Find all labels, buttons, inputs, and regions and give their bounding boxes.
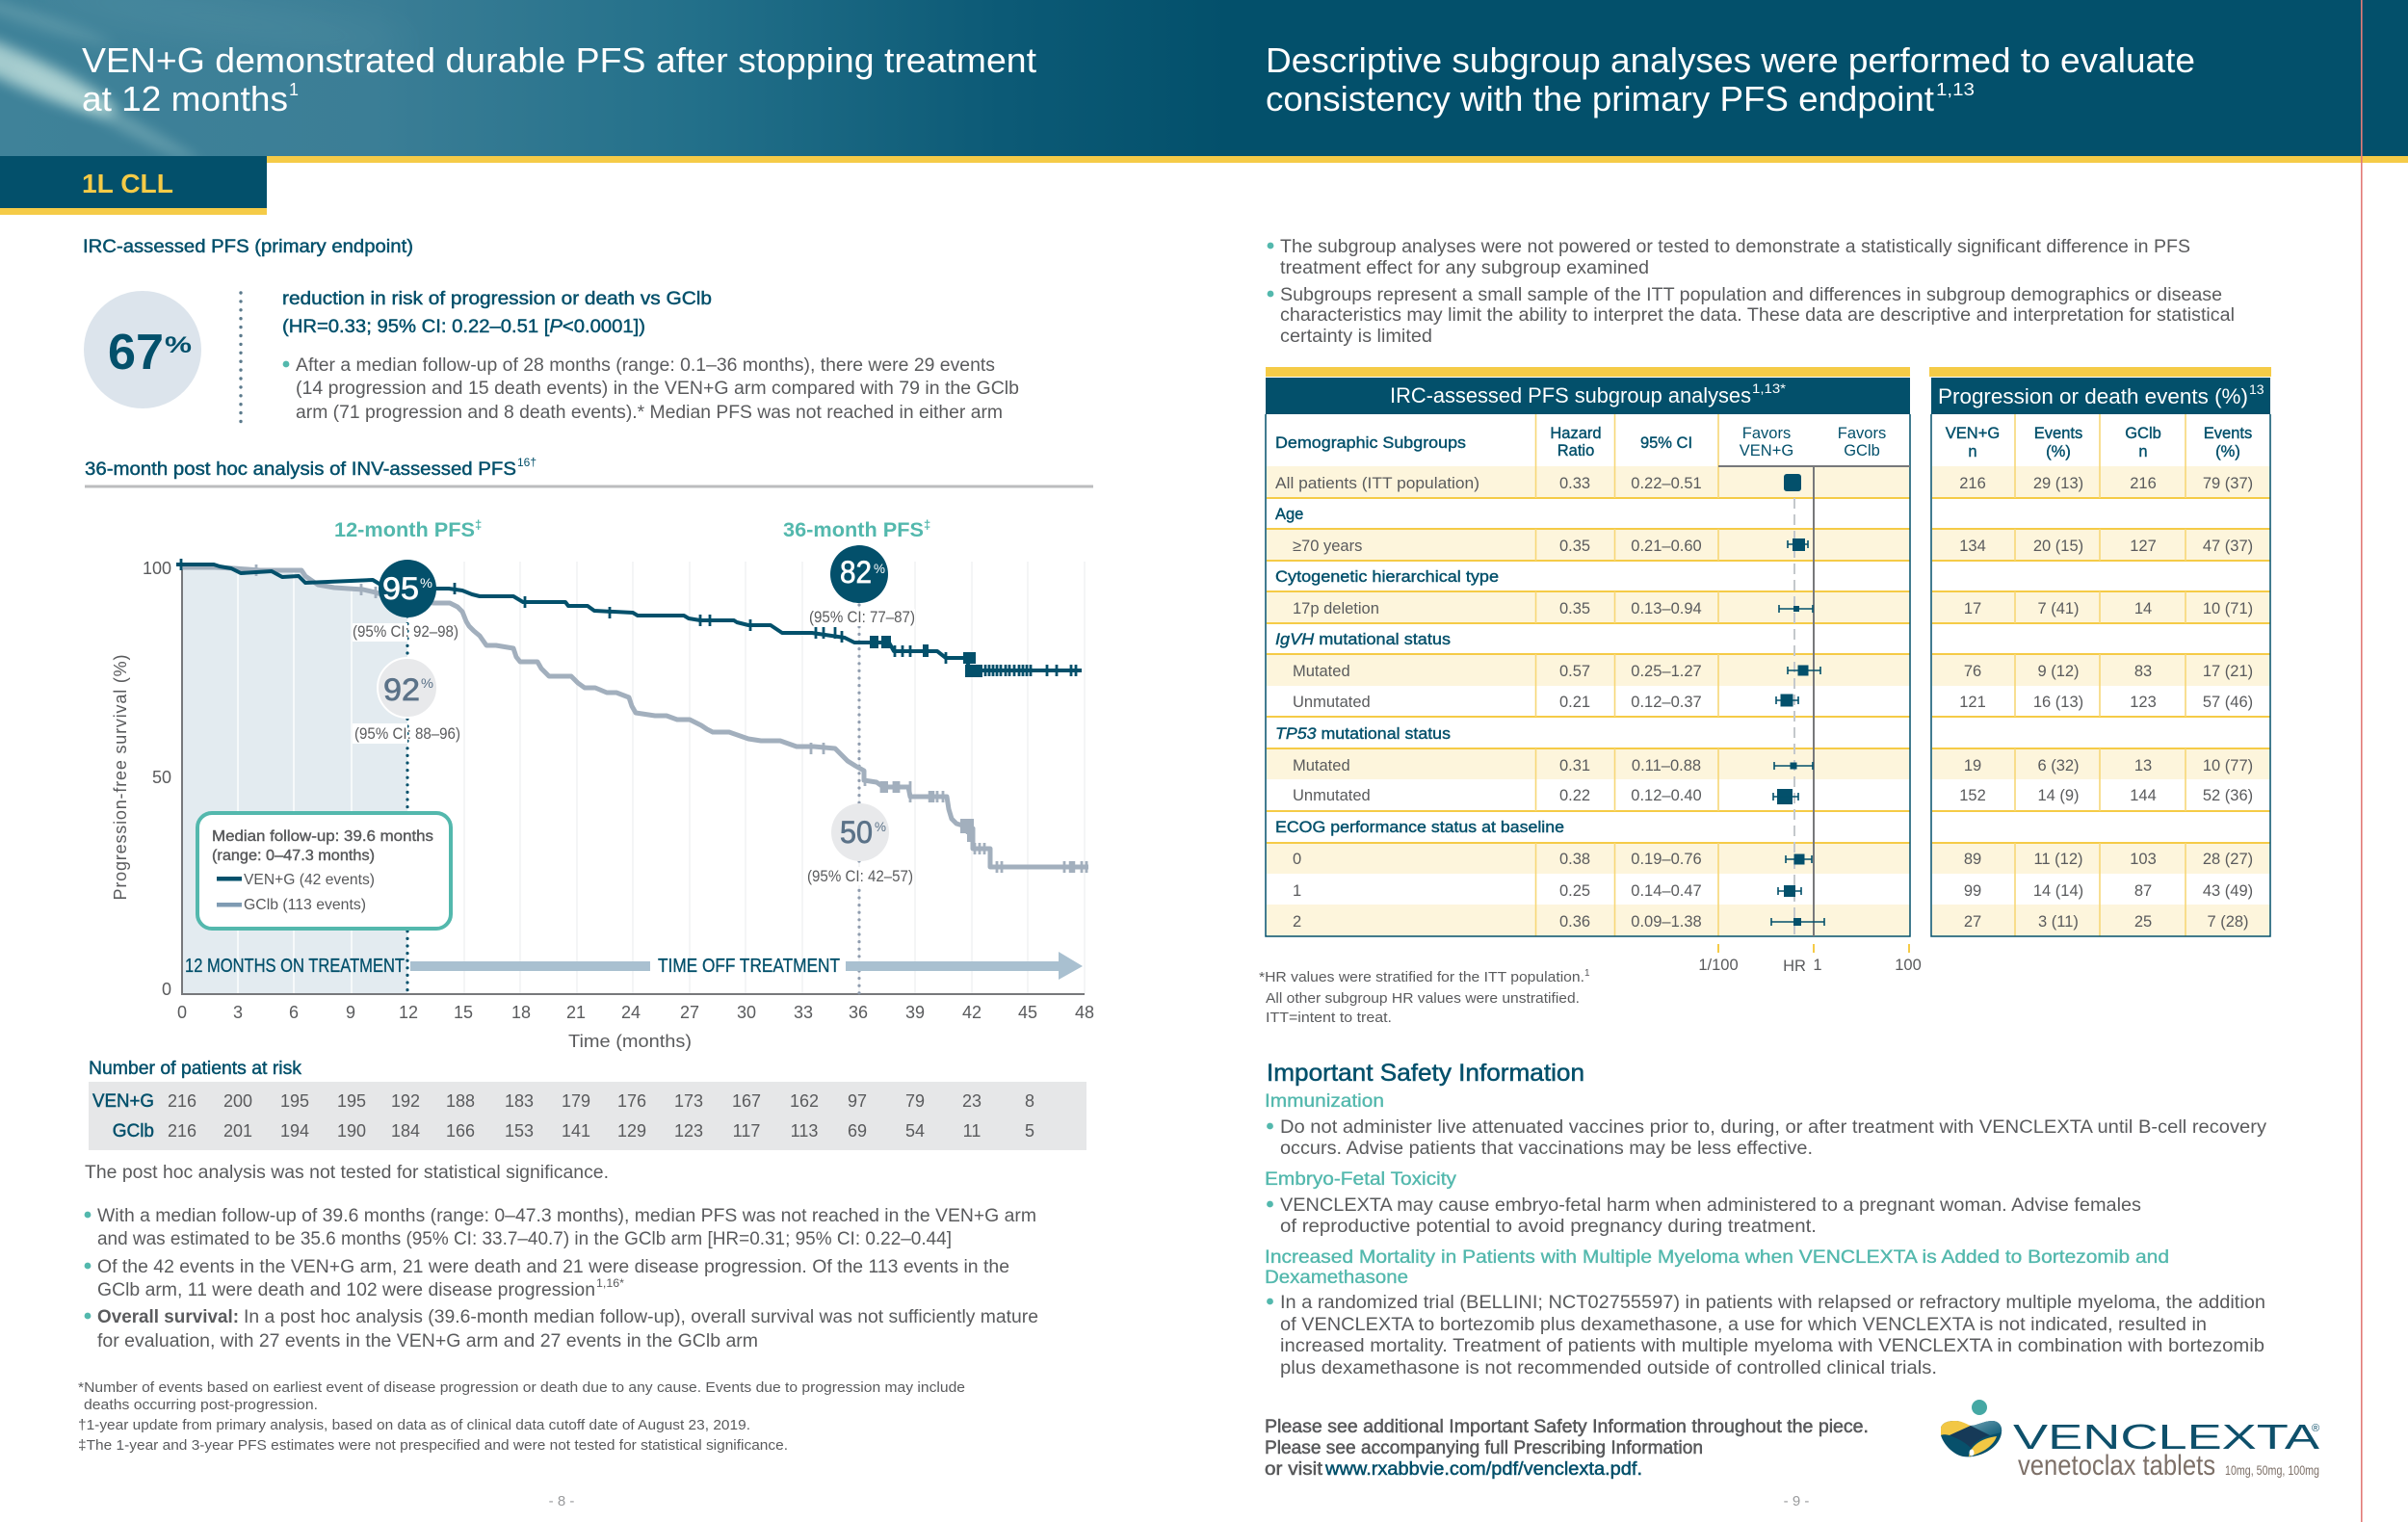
page number 9: - 9 - [1784, 1493, 1809, 1509]
heading: 36-month post hoc analysis: 16† [517, 458, 537, 469]
table: number of patients at risk: VEN+G [92, 1091, 154, 1112]
95% CI values [1631, 475, 1702, 931]
VEN+G curve [176, 559, 1082, 676]
text block: subgroup caveats: certainty is limited [1280, 327, 1432, 347]
right page title: consistency with the primary PFS endpoint [1266, 79, 1934, 118]
hazard ratio values: 0.36 [1559, 913, 1590, 931]
panel: Important Safety Information: VENCLEXTA may cause embryo-fetal harm when administered to a pregnant woman. Advise females [1280, 1195, 2141, 1216]
panel: 12-month PFS labels: 12-month PFS [334, 518, 475, 541]
panel: Important Safety Information: Immunization [1265, 1091, 1384, 1112]
left page title: at 12 months [82, 79, 288, 118]
row labels: ECOG performance status at baseline [1275, 819, 1564, 836]
panel: 36-month PFS labels [783, 517, 930, 885]
row labels: ≥70 years [1293, 538, 1362, 555]
footnotes: left page: ‡The 1-year and 3-year PFS estimates were not prespecified and were not tested for statistical significance. [78, 1437, 788, 1454]
row labels: Unmutated [1293, 787, 1371, 804]
x axis labels: Time (months) [568, 1032, 692, 1051]
treatment timeline arrow [185, 952, 1083, 980]
column headers [1946, 425, 2252, 460]
VEN+G events values [2033, 475, 2083, 931]
VEN+G risk row: 179 [562, 1091, 590, 1111]
text block: post hoc bullets: Of the 42 events in the VEN+G arm, 21 were death and 21 were disease progression. Of the 113 events in the [97, 1257, 1009, 1277]
hazard ratio values: 0.33 [1559, 475, 1590, 492]
95% CI values: 0.25–1.27 [1631, 663, 1702, 680]
panel: 12-month PFS labels: ‡ [475, 517, 482, 532]
text block: post hoc bullets: In a post hoc analysis (39.6-month median follow-up), overall survival was not sufficiently mature [244, 1307, 1038, 1327]
footnotes: forest plot: All other subgroup HR values were unstratified. [1266, 990, 1580, 1007]
row labels: 17p deletion [1293, 600, 1379, 617]
GClb n values: 14 [2134, 600, 2152, 617]
column headers: Events [2204, 425, 2252, 442]
95% CI values: 0.14–0.47 [1631, 882, 1702, 900]
column headers: Ratio [1557, 442, 1594, 459]
VEN+G n values: 76 [1964, 663, 1981, 680]
GClb events values: 43 (49) [2203, 882, 2253, 900]
VEN+G n values [1959, 475, 1986, 931]
VEN+G risk row: 188 [446, 1091, 475, 1111]
VEN+G risk row: 167 [732, 1091, 761, 1111]
95% CI values: 0.19–0.76 [1631, 851, 1702, 868]
VEN+G n values: 27 [1964, 913, 1981, 931]
column headers: n [2138, 443, 2148, 460]
row labels: Mutated [1293, 663, 1350, 680]
GClb n values: 123 [2130, 694, 2157, 711]
x axis labels: 30 [737, 1003, 756, 1022]
table: number of patients at risk: GClb [113, 1121, 154, 1142]
VEN+G risk row: 173 [674, 1091, 703, 1111]
text block: see prescribing information: www.rxabbvie.com/pdf/venclexta.pdf. [1324, 1459, 1642, 1480]
treatment timeline arrow: 12 MONTHS ON TREATMENT [185, 956, 405, 977]
panel: Important Safety Information: occurs. Advise patients that vaccinations may be less effective. [1280, 1139, 1813, 1159]
forest plot axis: 1/100 [1698, 957, 1739, 974]
text block: subgroup caveats: characteristics may limit the ability to interpret the data. These data are descriptive and interpretation for statistical [1280, 305, 2235, 326]
text block: post hoc bullets: Overall survival: [97, 1307, 239, 1327]
GClb risk row: 129 [617, 1121, 646, 1141]
text block: HR summary: (14 progression and 15 death events) in the VEN+G arm compared with 79 in the GClb [296, 379, 1019, 399]
panel: 12-month PFS labels: (95% CI: 92–98) [353, 623, 458, 641]
footnotes: left page: *Number of events based on earliest event of disease progression or death due to any cause. Events due to progression may include [78, 1379, 965, 1396]
footnotes: left page: †1-year update from primary analysis, based on data as of clinical data cutoff date of August 23, 2019. [78, 1417, 750, 1433]
text block: subgroup caveats: treatment effect for any subgroup examined [1280, 258, 1649, 278]
heading: primary endpoint: IRC-assessed PFS (primary endpoint) [83, 237, 413, 257]
VEN+G risk row: 200 [223, 1091, 252, 1111]
panel: 36-month PFS labels: 82 [840, 555, 872, 590]
hazard ratio values: 0.57 [1559, 663, 1590, 680]
text block: subgroup caveats: Subgroups represent a small sample of the ITT population and differences in subgroup demographics or disease [1280, 285, 2222, 305]
GClb events values: 10 (77) [2203, 757, 2253, 774]
text block: see prescribing information: Please see additional Important Safety Information throughout the piece. [1265, 1417, 1869, 1437]
text block: HR summary: After a median follow-up of 28 months (range: 0.1–36 months), there were 29 events [296, 355, 995, 376]
row labels: IgVH mutational status [1275, 631, 1451, 648]
GClb n values: 127 [2130, 538, 2157, 555]
x axis labels: 12 [399, 1003, 418, 1022]
panel: Important Safety Information: plus dexamethasone is not recommended outside of controlled clinical trials. [1280, 1358, 1937, 1378]
GClb events values: 28 (27) [2203, 851, 2253, 868]
hazard ratio values [1559, 475, 1590, 931]
logo: VENCLEXTA: venetoclax tablets [2018, 1450, 2215, 1482]
95% CI values: 0.12–0.37 [1631, 694, 1702, 711]
GClb risk row: 54 [905, 1121, 925, 1141]
footnotes: forest plot [1259, 968, 1590, 1026]
panel: Important Safety Information: of VENCLEXTA to bortezomib plus dexamethasone, a use for which VENCLEXTA is not indicated, resulted in [1280, 1315, 2207, 1335]
hazard ratio values: 0.38 [1559, 851, 1590, 868]
text block: HR summary: arm (71 progression and 8 death events).* Median PFS was not reached in either arm [296, 403, 1003, 423]
table: IRC-assessed PFS subgroup analyses: 1,13* [1752, 380, 1787, 396]
footnotes: left page [78, 1379, 965, 1454]
GClb risk row: 113 [791, 1121, 818, 1141]
VEN+G events values: 14 (9) [2037, 787, 2080, 804]
censoring blocks on GClb curve [880, 781, 975, 842]
GClb n values: 83 [2134, 663, 2152, 680]
x axis labels: 45 [1018, 1003, 1037, 1022]
x axis labels: 33 [794, 1003, 813, 1022]
GClb risk row: 5 [1025, 1121, 1034, 1141]
text block: post hoc bullets: and was estimated to be 35.6 months (95% CI: 33.7–40.7) in the GClb arm [HR=0.31; 95% CI: 0.22–0.44] [97, 1229, 952, 1249]
forest plot axis [1698, 944, 1922, 975]
text block: HR summary: (HR=0.33; 95% CI: 0.22–0.51 [ P<0.0001]) [282, 317, 645, 337]
column headers: GClb [2125, 425, 2161, 442]
x axis labels: 18 [511, 1003, 531, 1022]
shaded on-treatment region [182, 568, 407, 994]
panel: Important Safety Information: of reproductive potential to avoid pregnancy during treatment. [1280, 1217, 1817, 1237]
y axis labels: 0 [162, 980, 171, 999]
VEN+G n values: 216 [1959, 475, 1986, 492]
footnotes: forest plot: *HR values were stratified for the ITT population. [1259, 969, 1584, 985]
text block: subgroup caveats [1268, 237, 2235, 347]
95% CI values: 0.13–0.94 [1631, 600, 1702, 617]
panel: 12-month PFS labels: (95% CI: 88–96) [354, 725, 460, 743]
treatment timeline arrow: TIME OFF TREATMENT [658, 956, 840, 977]
GClb risk row [168, 1121, 1034, 1141]
legend: VEN+G (42 events) [244, 872, 375, 888]
column headers: VEN+G [1946, 425, 2000, 442]
footnotes: left page: deaths occurring post-progression. [84, 1397, 318, 1413]
x axis labels: 48 [1075, 1003, 1094, 1022]
panel: 36-month PFS labels: (95% CI: 77–87) [809, 609, 915, 626]
row labels: Cytogenetic hierarchical type [1275, 568, 1499, 586]
text block: see prescribing information [1265, 1417, 1869, 1480]
icon: logo mark [1941, 1400, 2002, 1456]
column headers: 95% CI [1640, 434, 1692, 452]
text block: post hoc bullets: GClb arm, 11 were death and 102 were disease progression [97, 1280, 595, 1300]
heading: 36-month post hoc analysis [85, 458, 1093, 487]
GClb risk row: 216 [168, 1121, 196, 1141]
right page title: 1,13 [1936, 80, 1975, 99]
legend: Median follow-up: 39.6 months [212, 828, 433, 845]
table: number of patients at risk: Number of patients at risk [89, 1059, 302, 1079]
right page title [1266, 40, 2195, 118]
column headers: Favors [1838, 425, 1886, 442]
table: progression or death events: Progression or death events (%) [1938, 384, 2248, 408]
VEN+G risk row: 8 [1025, 1091, 1034, 1111]
hazard ratio values: 0.22 [1559, 787, 1590, 804]
heading: 36-month post hoc analysis: 36-month post hoc analysis of INV-assessed PFS [85, 459, 516, 480]
VEN+G n values: 152 [1959, 787, 1986, 804]
forest plot axis: 100 [1895, 957, 1922, 974]
95% CI values: 0.12–0.40 [1631, 787, 1702, 804]
VEN+G risk row: 192 [391, 1091, 420, 1111]
text block: post hoc bullets: for evaluation, with 27 events in the VEN+G arm and 27 events in the GClb arm [97, 1331, 758, 1351]
VEN+G risk row: 97 [848, 1091, 867, 1111]
x axis labels: 9 [346, 1003, 355, 1022]
VEN+G risk row: 195 [280, 1091, 309, 1111]
VEN+G n values: 19 [1964, 757, 1981, 774]
GClb risk row: 153 [505, 1121, 534, 1141]
x axis labels: 39 [905, 1003, 925, 1022]
hazard ratio values: 0.21 [1559, 694, 1590, 711]
GClb n values: 13 [2134, 757, 2152, 774]
table: progression or death events: 13 [2249, 381, 2264, 397]
table: progression or death events [1929, 367, 2271, 936]
panel: Important Safety Information: Embryo-Fetal Toxicity [1265, 1169, 1457, 1190]
GClb risk row: 201 [223, 1121, 252, 1141]
column headers: Demographic Subgroups [1275, 434, 1466, 452]
GClb n values: 144 [2130, 787, 2157, 804]
x axis labels: 27 [680, 1003, 699, 1022]
GClb risk row: 141 [562, 1121, 590, 1141]
panel: Important Safety Information: Increased Mortality in Patients with Multiple Myeloma when VENCLEXTA is Added to Bortezomib and [1265, 1247, 2169, 1268]
right page title: Descriptive subgroup analyses were performed to evaluate [1266, 40, 2195, 80]
VEN+G risk row: 195 [337, 1091, 366, 1111]
row labels: Age [1275, 506, 1303, 523]
95% CI values: 0.09–1.38 [1631, 913, 1702, 931]
VEN+G n values: 134 [1959, 538, 1986, 555]
section tab: 1L CLL: 1L CLL [82, 169, 173, 198]
panel: 12-month PFS labels: % [421, 675, 433, 691]
GClb risk row: 194 [280, 1121, 309, 1141]
row labels: Mutated [1293, 757, 1350, 774]
GClb risk row: 69 [848, 1121, 867, 1141]
VEN+G events values: 11 (12) [2033, 851, 2083, 868]
panel: Important Safety Information: increased mortality. Treatment of patients with multiple myeloma with VENCLEXTA in combination with bortezomib [1280, 1336, 2264, 1356]
VEN+G events values: 7 (41) [2037, 600, 2080, 617]
GClb n values: 216 [2130, 475, 2157, 492]
hazard ratio values: 0.35 [1559, 600, 1590, 617]
table: number of patients at risk [89, 1059, 1086, 1150]
y axis labels [111, 559, 171, 999]
footnotes: forest plot: 1 [1584, 968, 1590, 979]
text block: HR summary [282, 289, 1019, 423]
panel: Important Safety Information [1265, 1060, 2267, 1378]
GClb risk row: 11 [963, 1121, 981, 1141]
VEN+G events values: 14 (14) [2033, 882, 2083, 900]
VEN+G risk row: 79 [905, 1091, 925, 1111]
VEN+G risk row: 183 [505, 1091, 534, 1111]
GClb events values: 17 (21) [2203, 663, 2253, 680]
column headers: Favors [1742, 425, 1791, 442]
text block: subgroup caveats: The subgroup analyses were not powered or tested to demonstrate a statistically significant difference in PFS [1280, 237, 2190, 257]
x axis labels: 0 [177, 1003, 187, 1022]
page trim line [2361, 0, 2363, 1522]
x axis labels [177, 1003, 1094, 1051]
left page title: 1 [289, 80, 299, 99]
legend [197, 813, 451, 929]
row labels: Unmutated [1293, 694, 1371, 711]
VEN+G events values: 6 (32) [2037, 757, 2080, 774]
hazard ratio values: 0.25 [1559, 882, 1590, 900]
VEN+G risk row: 216 [168, 1091, 196, 1111]
x axis labels: 3 [233, 1003, 243, 1022]
column headers: Events [2034, 425, 2082, 442]
panel: 36-month PFS labels: ‡ [924, 517, 930, 532]
text block: see prescribing information: Please see accompanying full Prescribing Information [1265, 1438, 1703, 1458]
x axis labels: 21 [566, 1003, 586, 1022]
logo: VENCLEXTA: 10mg, 50mg, 100mg [2225, 1462, 2319, 1478]
GClb risk row: 190 [337, 1121, 366, 1141]
dotted divider [239, 293, 243, 422]
GClb events values: 47 (37) [2203, 538, 2253, 555]
callout: 67 percent reduction: % [165, 332, 192, 358]
row labels [1275, 475, 1564, 931]
GClb risk row: 166 [446, 1121, 475, 1141]
panel: 36-month PFS labels: 50 [840, 815, 873, 850]
GClb events values: 10 (71) [2203, 600, 2253, 617]
row labels: 1 [1293, 882, 1301, 900]
column headers: (%) [2215, 443, 2240, 460]
95% CI values: 0.22–0.51 [1631, 475, 1702, 492]
column headers: (%) [2046, 443, 2071, 460]
VEN+G risk row: 162 [790, 1091, 819, 1111]
header banner [0, 0, 2408, 169]
GClb risk row: 117 [733, 1121, 760, 1141]
95% CI values: 0.21–0.60 [1631, 538, 1702, 555]
logo: VENCLEXTA: ® [2312, 1423, 2319, 1434]
GClb events values: 79 (37) [2203, 475, 2253, 492]
y axis labels: 50 [152, 768, 171, 787]
VEN+G n values: 121 [1959, 694, 1986, 711]
row labels: 0 [1293, 851, 1301, 868]
column headers: n [1968, 443, 1977, 460]
GClb curve [181, 564, 1088, 873]
GClb events values [2203, 475, 2253, 931]
x axis labels: 42 [962, 1003, 982, 1022]
text block: HR summary: reduction in risk of progression or death vs GClb [282, 289, 712, 309]
GClb n values [2130, 475, 2157, 931]
chart: Kaplan-Meier PFS curves [111, 517, 1094, 1051]
VEN+G events values: 16 (13) [2033, 694, 2083, 711]
GClb events values: 7 (28) [2207, 913, 2249, 931]
panel: Important Safety Information: Dexamethasone [1265, 1268, 1408, 1288]
VEN+G risk row: 176 [617, 1091, 646, 1111]
text block: post hoc bullets: 1,16* [596, 1276, 624, 1290]
forest plot axis: 1 [1813, 957, 1822, 974]
VEN+G n values: 17 [1964, 600, 1981, 617]
x axis labels: 36 [849, 1003, 868, 1022]
x axis labels: 6 [289, 1003, 299, 1022]
VEN+G risk row: 23 [962, 1091, 982, 1111]
GClb events values: 57 (46) [2203, 694, 2253, 711]
callout: 67 percent reduction: 67 [108, 325, 164, 380]
forest plot [1718, 466, 1910, 936]
VEN+G n values: 99 [1964, 882, 1981, 900]
GClb risk row: 123 [674, 1121, 703, 1141]
censoring blocks on VEN+G curve [870, 636, 982, 677]
shaded rows [1932, 466, 2270, 936]
table: IRC-assessed PFS subgroup analyses [1266, 367, 1922, 975]
hazard ratio values: 0.35 [1559, 538, 1590, 555]
left page title [82, 40, 1036, 118]
y axis labels: 100 [143, 559, 171, 578]
GClb events values: 52 (36) [2203, 787, 2253, 804]
95% CI values: 0.11–0.88 [1632, 757, 1701, 774]
row labels: All patients (ITT population) [1275, 475, 1479, 492]
column headers: VEN+G [1740, 442, 1793, 459]
callout: 67 percent reduction [84, 291, 201, 408]
panel: 36-month PFS labels: (95% CI: 42–57) [807, 868, 913, 885]
VEN+G events values: 29 (13) [2033, 475, 2083, 492]
logo: VENCLEXTA: VENCLEXTA [2013, 1417, 2319, 1456]
text block: post hoc bullets [85, 1206, 1038, 1351]
panel: Important Safety Information: Important Safety Information [1267, 1060, 1584, 1087]
table: IRC-assessed PFS subgroup analyses: IRC-assessed PFS subgroup analyses [1390, 383, 1751, 407]
logo: VENCLEXTA [1941, 1400, 2319, 1482]
panel: 36-month PFS labels: 36-month PFS [783, 518, 924, 541]
column headers: GClb [1844, 442, 1880, 459]
VEN+G risk row [168, 1091, 1034, 1111]
text block: post hoc bullets: With a median follow-up of 39.6 months (range: 0–47.3 months), median PFS was not reached in the VEN+G arm [97, 1206, 1036, 1226]
x axis labels: 24 [621, 1003, 641, 1022]
panel: 12-month PFS labels: % [420, 575, 432, 590]
row labels: 2 [1293, 913, 1301, 931]
x axis labels: 15 [454, 1003, 473, 1022]
VEN+G events values: 3 (11) [2038, 913, 2079, 931]
legend: GClb (113 events) [244, 897, 366, 913]
panel: Important Safety Information: Do not administer live attenuated vaccines prior to, during, or after treatment with VENCLEXTA until B-cell recovery [1280, 1117, 2267, 1138]
legend: (range: 0–47.3 months) [212, 848, 375, 864]
panel: 12-month PFS labels [334, 517, 482, 744]
y axis labels: Progression-free survival (%) [111, 655, 130, 900]
dotted reference lines [407, 605, 859, 994]
panel: 36-month PFS labels: % [875, 819, 886, 834]
GClb risk row: 184 [391, 1121, 420, 1141]
VEN+G events values: 9 (12) [2037, 663, 2080, 680]
forest plot axis: HR [1783, 958, 1806, 975]
row labels: TP53 mutational status [1275, 725, 1451, 743]
VEN+G events values: 20 (15) [2033, 538, 2083, 555]
column headers [1275, 425, 1886, 459]
panel: 36-month PFS labels: % [874, 561, 885, 576]
GClb n values: 25 [2134, 913, 2152, 931]
page number 8: - 8 - [549, 1493, 574, 1509]
column headers: Hazard [1550, 425, 1602, 442]
GClb n values: 103 [2130, 851, 2157, 868]
text: statistical note: The post hoc analysis was not tested for statistical significance. [85, 1163, 609, 1183]
shaded rows [1267, 466, 1910, 936]
left page title: VEN+G demonstrated durable PFS after stopping treatment [82, 40, 1036, 80]
GClb n values: 87 [2134, 882, 2152, 900]
panel: 12-month PFS labels: 95 [382, 571, 419, 606]
hazard ratio values: 0.31 [1559, 757, 1590, 774]
text block: see prescribing information: or visit [1265, 1459, 1323, 1480]
section tab: 1L CLL [0, 156, 267, 215]
VEN+G n values: 89 [1964, 851, 1981, 868]
footnotes: forest plot: ITT=intent to treat. [1266, 1010, 1392, 1026]
panel: Important Safety Information: In a randomized trial (BELLINI; NCT02755597) in patients with relapsed or refractory multiple myeloma, the addition [1280, 1293, 2265, 1313]
panel: 12-month PFS labels: 92 [383, 672, 420, 707]
